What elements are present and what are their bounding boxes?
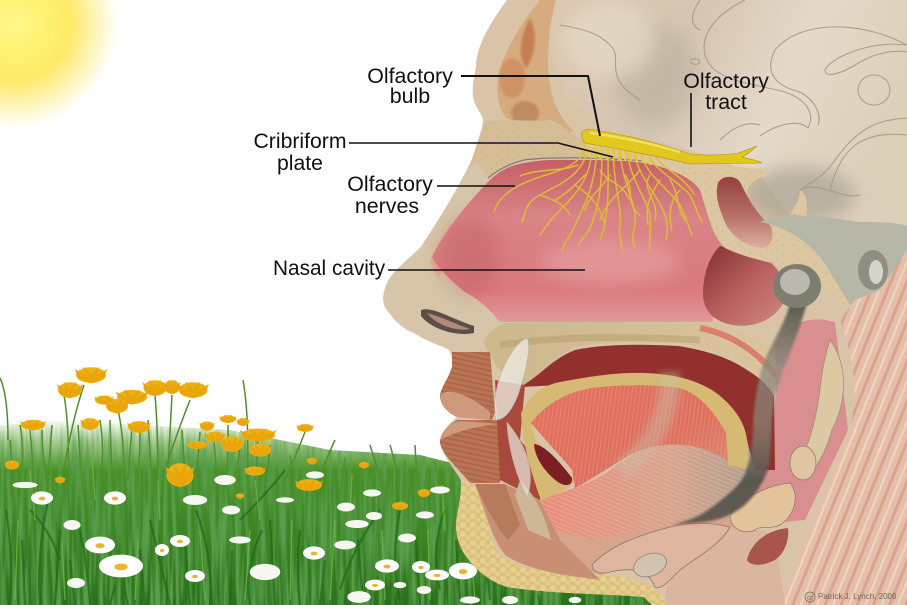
skull base bone: [640, 160, 855, 305]
tall grass blades and stems: [0, 378, 452, 505]
mouth interior shading: [495, 380, 545, 500]
gray occipital region: [760, 216, 907, 305]
label: Olfactory nerves: nerves: [355, 194, 419, 218]
chin muscles: [475, 484, 600, 580]
tongue muscle: [531, 385, 728, 488]
label: Olfactory tract: Olfactory: [683, 69, 769, 93]
nostril: [421, 309, 474, 334]
lighter grass highlights: [15, 460, 475, 600]
neck muscles: [780, 250, 907, 605]
copyright credit: Patrick J. Lynch, 2006: [818, 592, 897, 601]
label: Olfactory nerves: Olfactory: [347, 172, 433, 196]
Eustachian knob: [773, 264, 821, 308]
anatomical head cross-section: [383, 0, 907, 605]
salivary gland: [592, 523, 730, 588]
label: Olfactory tract: tract: [705, 90, 747, 114]
nasal bone: [470, 120, 585, 188]
label: Nasal cavity: Nasal cavity: [273, 257, 386, 280]
head silhouette and skin: [383, 0, 907, 605]
meadow: [0, 367, 660, 605]
nasal cavity: [432, 160, 733, 322]
label: Olfactory nerves: [347, 172, 515, 218]
label: Cribriform plate: Cribriform: [254, 130, 346, 153]
sun: [0, 0, 118, 128]
epiglottis: [730, 483, 795, 532]
tongue gold surface band: [521, 373, 750, 500]
olfactory nerves: [494, 150, 702, 250]
floor of mouth backing: [541, 470, 760, 575]
brain: [550, 0, 907, 240]
label: Olfactory bulb: Olfactory: [367, 64, 453, 88]
daisies: [12, 471, 581, 604]
yellow flowers: [4, 367, 431, 510]
frontal sinus and forehead muscle: [497, 0, 575, 132]
copyright credit: cc: [807, 596, 813, 602]
chin fat layer: [456, 480, 668, 605]
sphenoid sinus: [717, 177, 772, 248]
forehead soft shading: [613, 25, 697, 125]
lower jaw bone: [515, 480, 551, 540]
label: Olfactory bulb: [367, 64, 600, 136]
brain folds: [560, 0, 907, 196]
soft grey air passage across tongue: [620, 372, 670, 470]
throat slit: [747, 528, 788, 565]
nose cartilage and skin: [383, 160, 500, 350]
label: Cribriform plate: plate: [277, 152, 323, 175]
upper incisor: [495, 338, 529, 420]
pharyngeal dark tube: [670, 300, 808, 525]
olfactory bulb: [582, 129, 762, 165]
grass field: [0, 420, 660, 605]
neck front tissue: [665, 525, 785, 605]
tongue lower body: [541, 432, 757, 540]
lower incisor: [507, 422, 530, 497]
sublingual notch: [534, 444, 572, 485]
choana opening: [703, 246, 786, 326]
pharynx wall: [745, 319, 848, 525]
label: Olfactory bulb: bulb: [390, 84, 430, 108]
label: Olfactory tract: [683, 69, 769, 147]
upper lip: [440, 352, 495, 420]
oral cavity: [521, 345, 775, 470]
pharyngeal tonsil glands: [790, 340, 844, 480]
label: Cribriform plate: [254, 130, 613, 175]
darker grass in foreground: [6, 470, 540, 605]
lower lip: [440, 420, 505, 483]
hard palate: [483, 322, 799, 407]
